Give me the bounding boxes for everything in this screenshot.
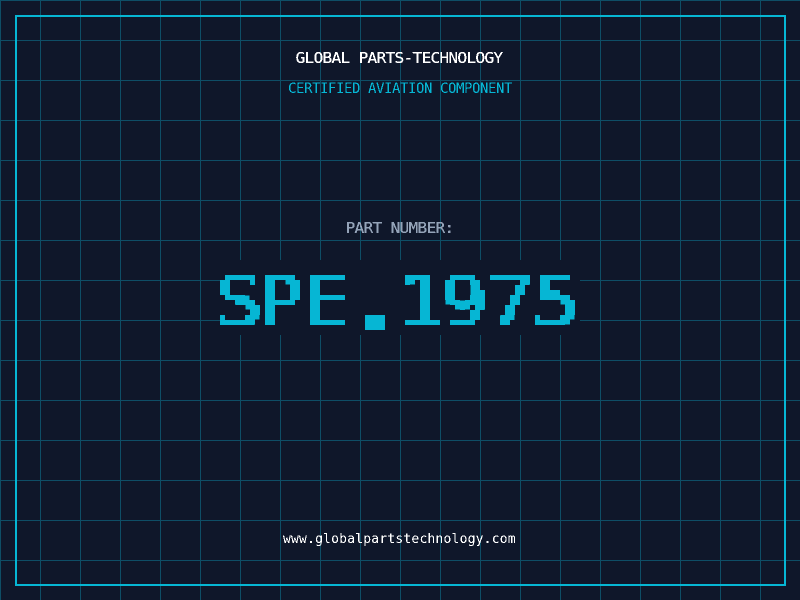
part number value: 1975 [397,261,580,342]
subtitle: CERTIFIED AVIATION COMPONENT [288,81,513,97]
website url: www.globalpartstechnology.com [283,532,516,547]
part number value: . [339,233,412,355]
part number label: PART NUMBER: [346,220,453,237]
part number backing panel [220,260,580,335]
part number value: SPE [215,261,350,342]
part number value [215,233,580,355]
company name heading: GLOBAL PARTS-TECHNOLOGY [296,50,504,67]
